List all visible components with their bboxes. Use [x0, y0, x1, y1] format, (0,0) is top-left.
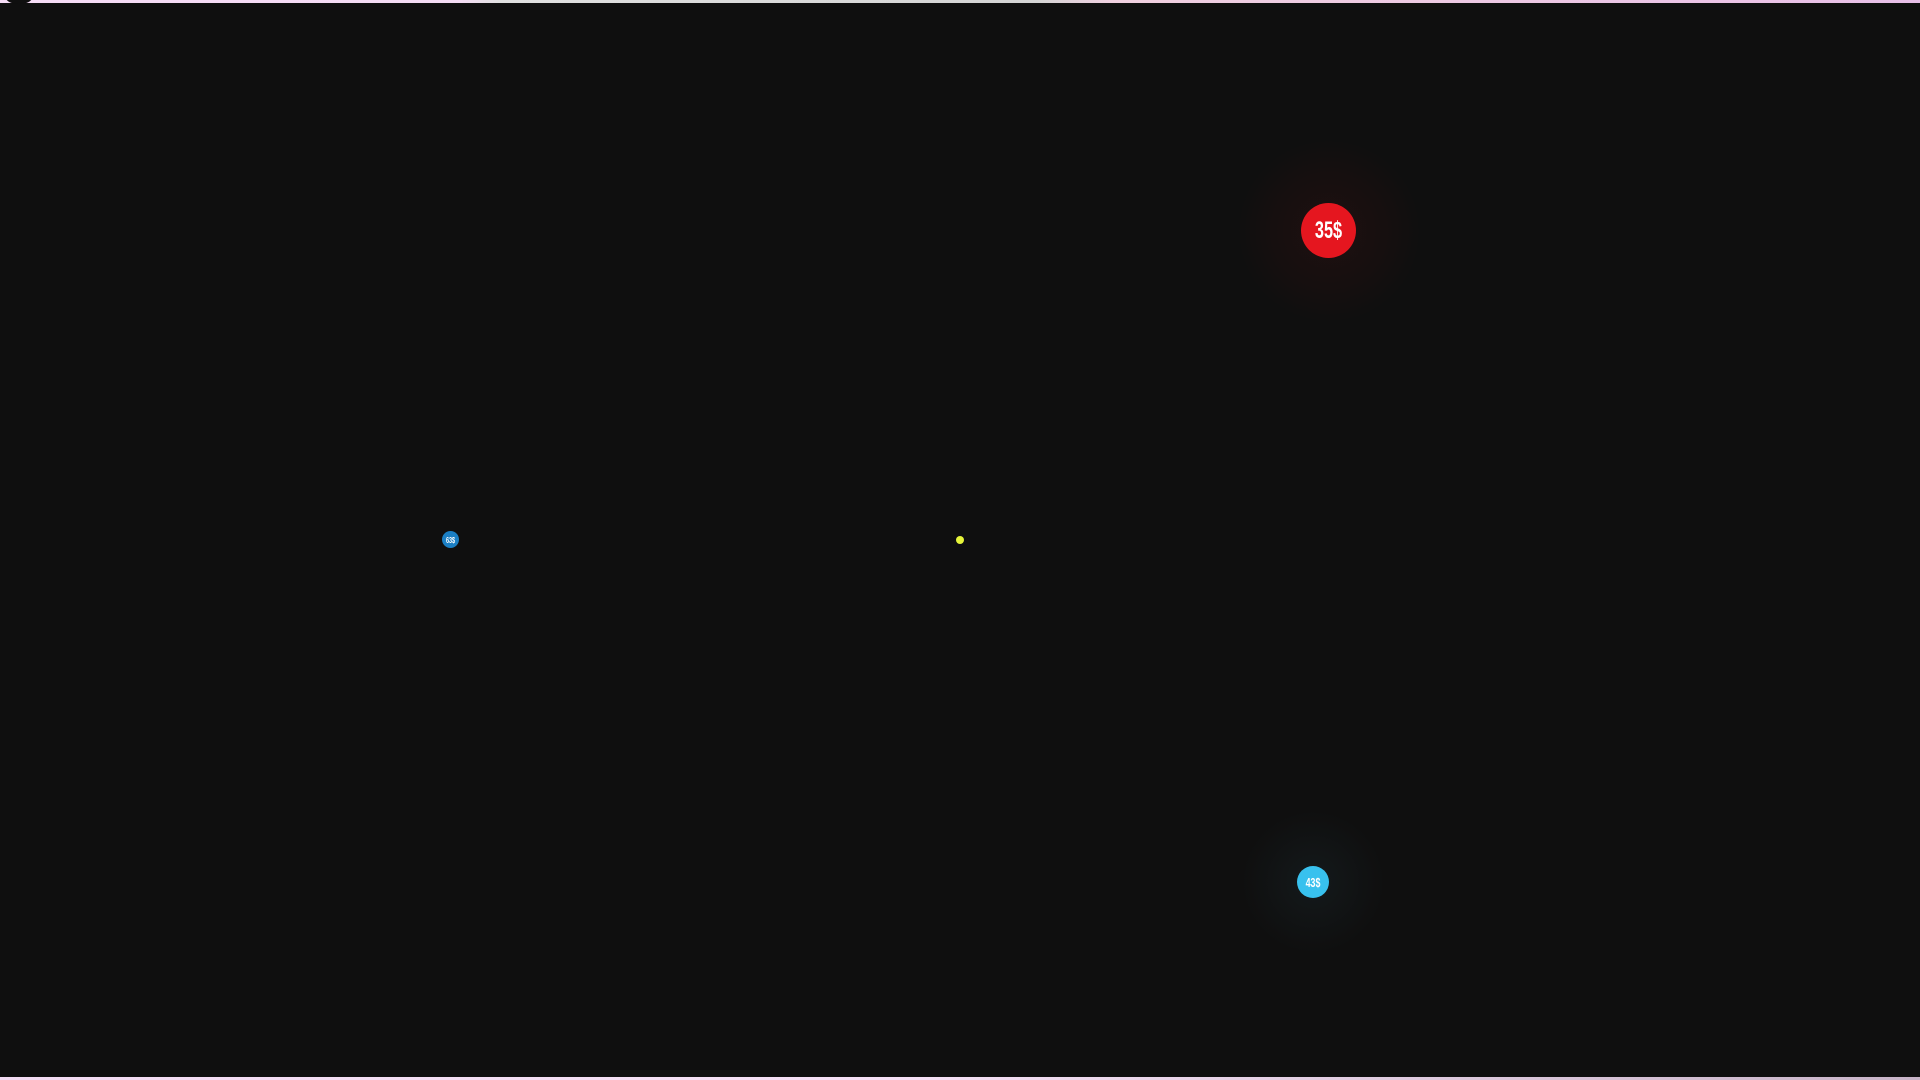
marker: dark blue 63$ [442, 531, 458, 548]
marker: red 35$ [1301, 203, 1356, 258]
glow: red marker [1239, 141, 1419, 321]
glow: light blue marker [1243, 812, 1383, 952]
marker: yellow dot [956, 536, 964, 544]
marker: light blue 43$ [1297, 866, 1329, 898]
bottom edge strip [0, 1077, 1920, 1080]
marker: light blue 43$: 43$ [1306, 875, 1320, 890]
marker: dark blue 63$: 63$ [445, 536, 455, 545]
top edge strip [0, 0, 1920, 2]
marker: red 35$: 35$ [1315, 217, 1342, 244]
top-left notch [6, 0, 32, 4]
